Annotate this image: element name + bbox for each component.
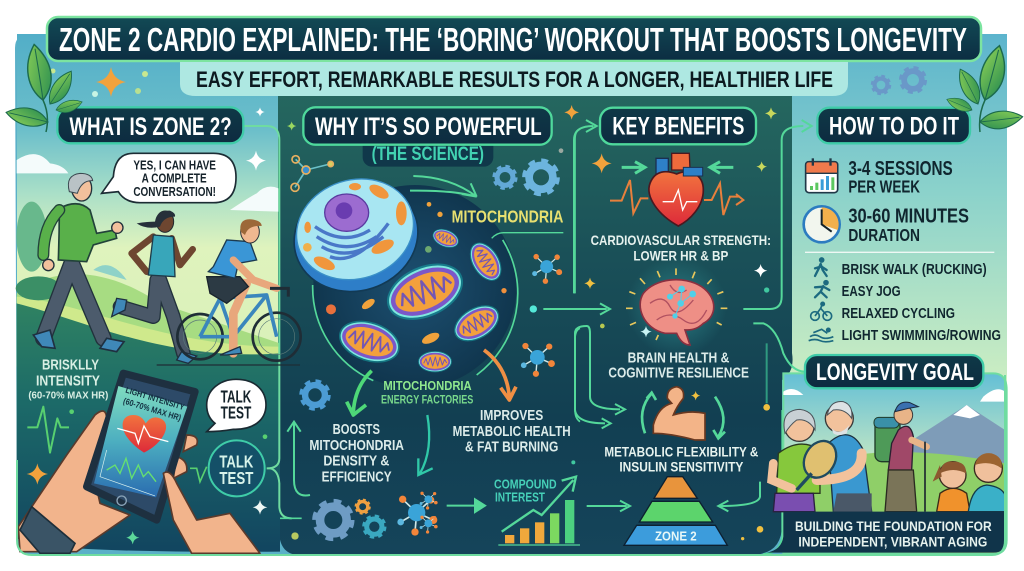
icon: clock xyxy=(804,206,840,242)
label: what is zone 2: WHAT IS ZONE 2? xyxy=(69,113,232,141)
caption band: BUILDING THE FOUNDATION FOR xyxy=(795,518,992,534)
speech bubble: YES, I CAN HAVE xyxy=(133,158,216,172)
text: cardiovascular strength xyxy=(591,232,771,264)
icon: mitochondria group xyxy=(326,202,508,372)
text: brain health xyxy=(608,350,749,382)
text: minutes: DURATION xyxy=(848,225,920,245)
text: boosts mitochondria: BOOSTS xyxy=(333,422,380,438)
panel: center science xyxy=(278,96,793,555)
hills xyxy=(16,154,280,552)
text: improves metabolic health: METABOLIC HEALTH xyxy=(453,424,571,440)
icon: gears lower xyxy=(302,382,384,537)
icon: leaves left xyxy=(5,42,84,132)
decor: top left accents xyxy=(50,67,148,97)
text: boosts mitochondria: DENSITY & xyxy=(323,454,390,470)
text: minutes: 30-60 MINUTES xyxy=(848,206,969,228)
icon: animal cell xyxy=(280,164,432,307)
text: improves metabolic health: & FAT BURNING xyxy=(465,440,558,456)
list: activities xyxy=(809,258,1001,344)
icon: cyclist xyxy=(157,219,301,365)
text: boosts mitochondria: EFFICIENCY xyxy=(322,470,392,486)
heading: why it's so powerful: (THE SCIENCE) xyxy=(372,144,484,165)
text: compound interest: COMPOUND xyxy=(494,476,557,491)
text: metabolic flexibility: METABOLIC FLEXIBILITY & xyxy=(604,444,758,460)
text: briskly intensity: INTENSITY xyxy=(36,373,100,389)
arrow: to mitochondria label xyxy=(410,176,477,197)
panel: key benefits and how to xyxy=(566,106,1007,554)
arrow: loop up xyxy=(287,422,310,496)
talk bubble: TEST xyxy=(221,402,252,422)
text: compound interest xyxy=(494,476,557,505)
caption band xyxy=(767,512,1006,553)
chart: growth bars xyxy=(498,477,580,545)
text: brain health: COGNITIVE RESILIENCE xyxy=(608,366,749,382)
sparkle accents xyxy=(280,105,580,540)
text: boosts mitochondria xyxy=(309,422,404,486)
icon: network xyxy=(291,156,333,191)
icon: calendar xyxy=(806,158,838,193)
pyramid: zone 2: ZONE 2 xyxy=(655,530,697,544)
sparkles xyxy=(566,106,777,540)
text: briskly intensity: (60-70% MAX HR) xyxy=(28,390,108,401)
text: improves metabolic health: IMPROVES xyxy=(480,408,544,424)
text: sessions: 3-4 SESSIONS xyxy=(848,158,953,180)
icon: running woman xyxy=(112,211,197,363)
icon: walker xyxy=(815,258,827,276)
icon: bike xyxy=(811,302,832,320)
text: energy factories xyxy=(381,378,473,407)
subtitle: EASY EFFORT, REMARKABLE RESULTS FOR A LONGER, HEALTHIER LIFE xyxy=(196,67,833,92)
talk test circle xyxy=(190,440,265,496)
people: children xyxy=(933,453,1005,512)
text: energy factories: ENERGY FACTORIES xyxy=(381,393,473,407)
panel: longevity goal xyxy=(767,355,1007,554)
icon: swimmer xyxy=(809,328,833,342)
pyramid: zone 2 xyxy=(624,477,727,545)
panel: right sky xyxy=(785,34,1007,384)
connector lines xyxy=(570,120,812,554)
text: metabolic flexibility xyxy=(604,444,758,475)
arrow: factories to molecules xyxy=(418,415,433,475)
text: energy factories: MITOCHONDRIA xyxy=(383,378,472,393)
text: sessions xyxy=(848,158,953,197)
disc behind mitochondria xyxy=(313,185,518,388)
icon: gears top right xyxy=(873,69,924,93)
icon: gears xyxy=(495,162,556,193)
icon: hand holding phone: (60-70% MAX HR) xyxy=(122,396,182,423)
speech bubble xyxy=(102,153,236,203)
icon: walking man xyxy=(33,173,124,352)
talk test circle: TALK xyxy=(219,451,254,471)
icon: heart xyxy=(610,153,743,226)
label: longevity goal xyxy=(805,355,983,388)
text: cardiovascular strength: CARDIOVASCULAR STRENGTH: xyxy=(591,232,771,248)
label: how to do it: HOW TO DO IT xyxy=(829,112,959,140)
text: cardiovascular strength: LOWER HR & BP xyxy=(633,248,728,264)
text: boosts mitochondria: MITOCHONDRIA xyxy=(309,438,404,454)
list: activities: BRISK WALK (RUCKING) xyxy=(842,262,987,278)
panel: what is zone 2 xyxy=(16,107,301,553)
label: how to do it xyxy=(817,108,970,143)
icon: ecg line xyxy=(27,407,69,453)
sparkles xyxy=(27,107,267,544)
speech bubble: CONVERSATION! xyxy=(133,185,216,199)
talk bubble: TALK xyxy=(221,387,252,407)
icon: molecule upper right xyxy=(532,254,562,284)
icon: molecule lower right xyxy=(521,343,555,377)
heading: why it's so powerful xyxy=(303,107,552,167)
subtitle xyxy=(180,62,848,96)
talk bubble xyxy=(207,379,266,432)
text: compound interest: INTEREST xyxy=(495,490,545,505)
text: mitochondria label: MITOCHONDRIA xyxy=(452,207,564,227)
text: sessions: PER WEEK xyxy=(848,177,920,197)
text: minutes xyxy=(848,206,969,245)
people: grandmother xyxy=(772,409,820,512)
panel: left sky xyxy=(17,34,282,379)
icon: flexed arm xyxy=(642,387,725,440)
icon: molecule network xyxy=(397,492,438,536)
icon: hand holding phone: LIGHT INTENSITY xyxy=(124,385,186,412)
connector lines xyxy=(243,126,292,518)
icon: jogger xyxy=(815,281,829,297)
icon: hand holding phone xyxy=(18,373,260,553)
icon: brain xyxy=(626,257,727,357)
text: metabolic flexibility: INSULIN SENSITIVITY xyxy=(619,459,744,475)
text: brain health: BRAIN HEALTH & xyxy=(628,350,729,366)
arrow: improve xyxy=(484,350,516,400)
scene: mountains xyxy=(783,389,1005,513)
people: hiker xyxy=(874,402,927,512)
speech bubble: A COMPLETE xyxy=(142,172,207,186)
label: key benefits: KEY BENEFITS xyxy=(612,112,744,140)
text: briskly intensity xyxy=(28,357,108,401)
caption band: INDEPENDENT, VIBRANT AGING xyxy=(798,534,987,550)
panel: why it is so powerful xyxy=(280,105,580,545)
list: activities: RELAXED CYCLING xyxy=(842,306,955,322)
text: briskly intensity: BRISKLLY xyxy=(42,357,99,373)
icon: leaves right xyxy=(945,43,1024,132)
people: grandfather with racket xyxy=(797,401,872,512)
frame border bottom xyxy=(17,375,1005,555)
label: key benefits xyxy=(600,108,756,144)
list: activities: EASY JOG xyxy=(842,284,901,300)
talk test circle: TEST xyxy=(219,468,254,488)
label: what is zone 2 xyxy=(57,107,243,143)
arrow: to chart xyxy=(447,499,485,512)
text: improves metabolic health xyxy=(453,408,571,456)
label: longevity goal: LONGEVITY GOAL xyxy=(816,359,974,386)
arrow: boost xyxy=(347,371,372,415)
heading: why it's so powerful: WHY IT’S SO POWERFUL xyxy=(315,113,542,141)
